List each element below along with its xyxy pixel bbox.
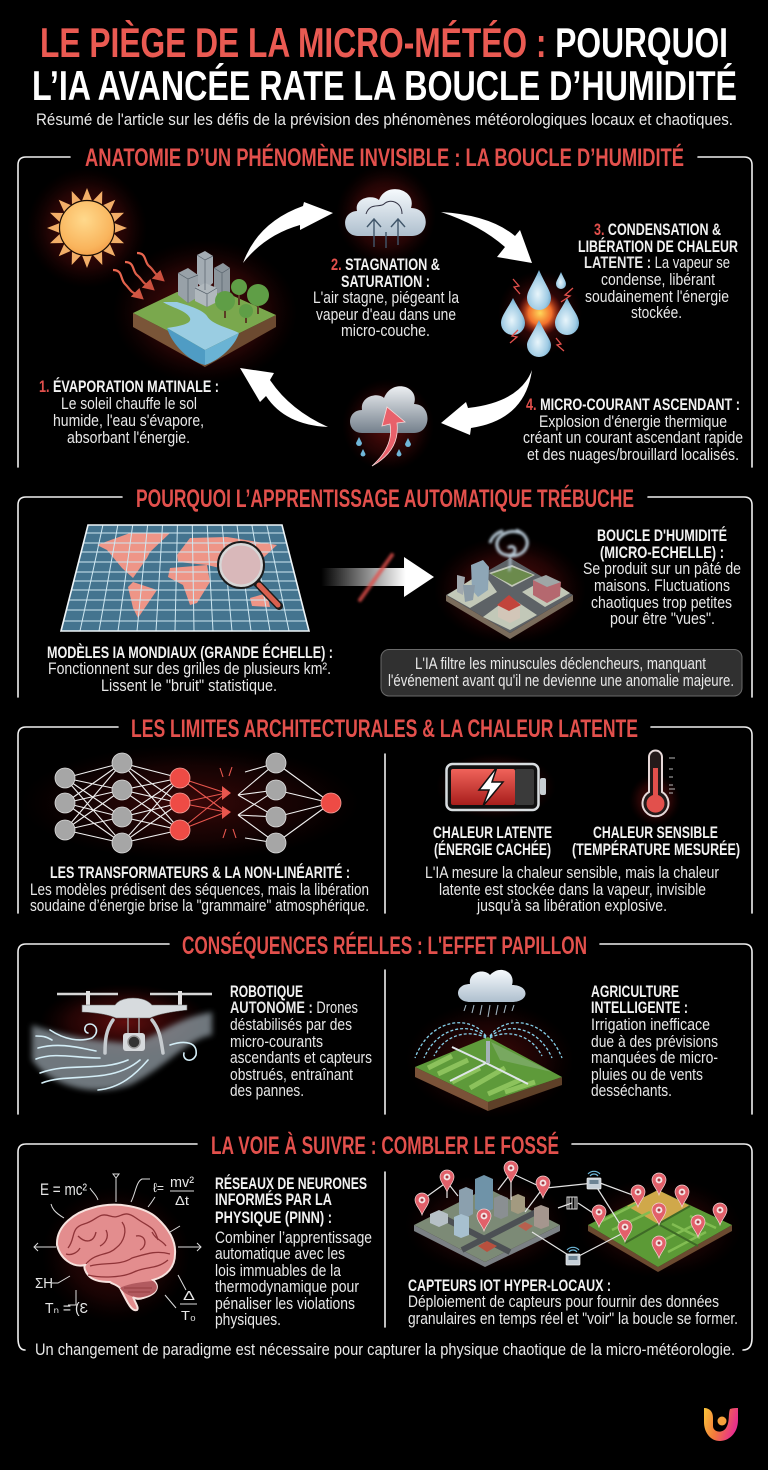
text: robotique autonome — [230, 983, 372, 1100]
text: robotique autonome: ROBOTIQUE — [230, 983, 303, 1001]
text: étape 3: 3. CONDENSATION & — [594, 221, 721, 239]
text: PINN — [215, 1174, 372, 1329]
text: transformateurs: Les modèles prédisent des séquences, mais la libération — [30, 881, 369, 899]
text: agriculture intelligente: pluies ou de vents — [591, 1066, 703, 1084]
icon: brain with equations: Δt — [175, 1193, 189, 1208]
text: boucle d'humidité: chaotiques trop petites — [591, 594, 732, 612]
text: agriculture intelligente: AGRICULTURE — [591, 983, 679, 1001]
text: étape 2: 2. STAGNATION & — [331, 256, 440, 274]
text: étape 2 — [313, 256, 460, 340]
text: étape 1: 1. ÉVAPORATION MATINALE : — [39, 377, 219, 396]
text: PINN: automatique avec les — [215, 1245, 345, 1263]
text: étape 4 — [523, 396, 743, 464]
text: explication chaleur: L'IA mesure la chaleur sensible, mais la chaleur — [425, 864, 719, 882]
text: chaleur latente — [433, 824, 552, 859]
text: agriculture intelligente: desséchants. — [591, 1082, 672, 1100]
text: étape 1 — [39, 377, 219, 447]
icon: thermometer — [629, 750, 681, 826]
arrow: condensation vers courant ascendant — [441, 370, 532, 435]
icon: drone in turbulence — [32, 984, 212, 1090]
icon: brain with equations: Δ — [183, 1288, 195, 1303]
text: agriculture intelligente: Irrigation inefficace — [591, 1016, 710, 1034]
text: modèles IA mondiaux: Fonctionnent sur des grilles de plusieurs km². — [48, 660, 331, 678]
text: PINN: pénaliser les violations — [215, 1295, 355, 1313]
panel: limites architecturales et chaleur latente — [18, 715, 752, 915]
text: agriculture intelligente: INTELLIGENTE : — [591, 999, 688, 1017]
text: PINN: INFORMÉS PAR LA — [215, 1190, 332, 1209]
text: étape 2: micro-couche. — [341, 322, 430, 340]
text: PINN: physiques. — [215, 1311, 281, 1329]
icon: brain with equations: E = mc² — [40, 1180, 87, 1199]
icon: brain with equations: Tₙ = (Ɛ — [45, 1300, 88, 1317]
icon: sun — [27, 168, 147, 288]
text: étape 4: Explosion d'énergie thermique — [539, 413, 727, 431]
text: PINN: PHYSIQUE (PINN) : — [215, 1209, 332, 1227]
arrow: passage à la micro-échelle — [321, 555, 434, 600]
text: robotique autonome: micro-courants — [230, 1033, 323, 1051]
icon: brain with equations — [34, 1174, 201, 1323]
icon: brain with equations: ℓ= — [153, 1180, 164, 1195]
icon: world map grid with magnifier — [61, 525, 309, 631]
text: étape 3: LATENTE : La vapeur se — [584, 254, 730, 272]
text: boucle d'humidité: (MICRO-ECHELLE) : — [600, 544, 724, 562]
title: LE PIÈGE DE LA MICRO-MÉTÉO : POURQUOI — [40, 19, 728, 66]
icon: city block with vortex — [434, 530, 586, 644]
panel: anatomie de la boucle d'humidité — [18, 143, 752, 471]
text: étape 3: stockée. — [631, 304, 682, 322]
icon: brain with equations: T₀ — [181, 1308, 196, 1323]
icon: brain with equations: ΣH — [35, 1275, 53, 1292]
text: boucle d'humidité — [583, 526, 741, 628]
heading: voie à suivre: LA VOIE À SUIVRE : COMBLER LE FOSSÉ — [211, 1131, 559, 1160]
text: agriculture intelligente: due à des prévisions — [591, 1033, 718, 1051]
text: étape 3: condense, libérant — [601, 271, 715, 289]
arrow: stagnation vers condensation — [441, 212, 532, 263]
text: robotique autonome: des pannes. — [230, 1082, 304, 1100]
text: PINN: thermodynamique pour — [215, 1278, 359, 1296]
text: explication chaleur: latente est stockée dans la vapeur, invisible — [439, 881, 706, 899]
text: robotique autonome: ascendants et capteurs — [230, 1049, 372, 1067]
text: boucle d'humidité: Se produit sur un pâté de — [583, 560, 741, 578]
panel: conséquences réelles — [18, 931, 752, 1118]
icon: irrigated field with cloud — [406, 970, 574, 1118]
text: transformateurs — [30, 863, 369, 915]
text: chaleur latente: CHALEUR LATENTE — [433, 824, 552, 842]
diagram: IoT sensor network over city and farm — [405, 1161, 742, 1278]
text: robotique autonome: AUTONOME : Drones — [230, 999, 358, 1017]
text: chaleur sensible: CHALEUR SENSIBLE — [593, 824, 718, 842]
callout: filtrage de l'IA — [381, 650, 742, 696]
text: étape 1: humide, l'eau s'évapore, — [53, 412, 204, 430]
callout: filtrage de l'IA: L'IA filtre les minuscules déclencheurs, manquant — [415, 655, 706, 673]
arrow: évaporation vers stagnation — [243, 202, 333, 263]
icon: landscape diorama — [113, 240, 297, 384]
text: modèles IA mondiaux — [47, 643, 333, 695]
text: capteurs IoT — [408, 1277, 738, 1328]
text: étape 1: Le soleil chauffe le sol — [61, 395, 197, 413]
text: PINN: RÉSEAUX DE NEURONES — [215, 1174, 367, 1193]
text: transformateurs: LES TRANSFORMATEURS & LA NON-LINÉARITÉ : — [50, 863, 350, 882]
text: boucle d'humidité: maisons. Fluctuations — [594, 577, 730, 595]
text: étape 1: absorbant l'énergie. — [67, 429, 190, 447]
diagram: neural network breaking — [20, 745, 360, 861]
icon: brain with equations: mv² — [170, 1174, 194, 1191]
text: étape 3 — [578, 221, 738, 322]
heading: conséquences: CONSÉQUENCES RÉELLES : L'EFFET PAPILLON — [182, 931, 587, 960]
text: boucle d'humidité: BOUCLE D'HUMIDITÉ — [597, 526, 727, 545]
text: étape 2: SATURATION : — [341, 273, 430, 291]
icon: brand logo — [704, 1408, 738, 1441]
text: étape 2: vapeur d'eau dans une — [316, 306, 456, 324]
text: agriculture intelligente: manquées de micro- — [591, 1049, 718, 1067]
text: chaleur sensible — [572, 824, 740, 859]
text: agriculture intelligente — [591, 983, 718, 1100]
icon: heat rays — [113, 253, 163, 298]
text: étape 2: L'air stagne, piégeant la — [313, 289, 460, 307]
text: robotique autonome: déstabilisés par des — [230, 1016, 352, 1034]
icon: condensing drops — [498, 270, 582, 357]
text: boucle d'humidité: pour être "vues". — [610, 610, 715, 628]
arrow: courant ascendant vers évaporation — [240, 368, 328, 427]
title — [32, 19, 737, 109]
text: robotique autonome: obstrués, entraînant — [230, 1066, 353, 1084]
text: explication chaleur: jusqu'à sa libération explosive. — [476, 897, 667, 915]
text: capteurs IoT: CAPTEURS IOT HYPER-LOCAUX : — [408, 1277, 611, 1295]
icon: storm cloud with updraft — [342, 379, 434, 471]
icon: saturated cloud — [336, 165, 436, 265]
icon: battery — [436, 753, 556, 819]
text: transformateurs: soudaine d’énergie brise la "grammaire" atmosphérique. — [30, 897, 369, 915]
text: modèles IA mondiaux: MODÈLES IA MONDIAUX (GRANDE ÉCHELLE) : — [47, 643, 333, 662]
text: modèles IA mondiaux: Lissent le "bruit" statistique. — [101, 677, 277, 695]
text: explication chaleur — [425, 864, 719, 915]
text: chaleur latente: (ÉNERGIE CACHÉE) — [434, 840, 551, 859]
panel: pourquoi l'apprentissage automatique trébuche — [18, 484, 752, 697]
panel: la voie à suivre — [18, 1131, 752, 1359]
text: étape 3: soudainement l'énergie — [585, 288, 729, 306]
text: PINN: lois immuables de la — [215, 1262, 342, 1280]
text: PINN: Combiner l’apprentissage — [215, 1229, 372, 1247]
